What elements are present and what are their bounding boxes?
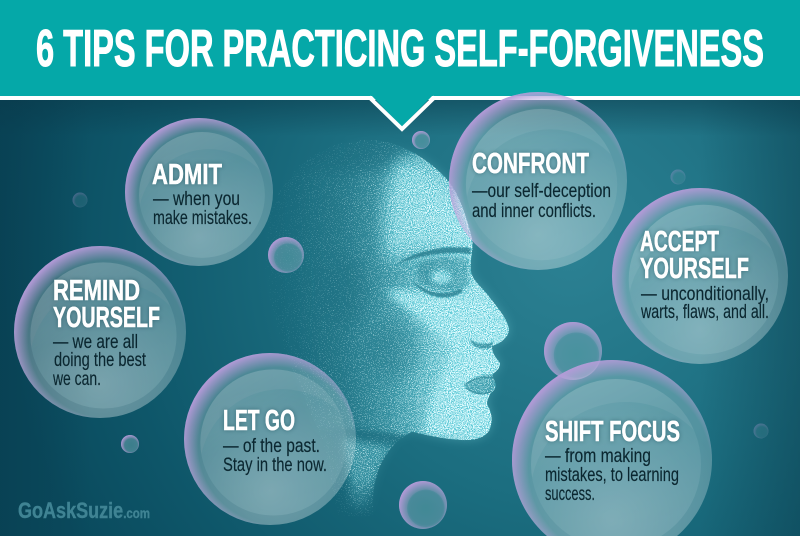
bubble: let go: Stay in the now. xyxy=(223,454,327,476)
bubble: confront: —our self-deception xyxy=(472,180,611,202)
bubble: accept yourself: — unconditionally, xyxy=(641,283,769,305)
bubble: confront: CONFRONT xyxy=(472,148,589,180)
bubble: let go: — of the past. xyxy=(223,435,320,457)
bubble: let go xyxy=(184,353,365,536)
bubble: remind yourself: we can. xyxy=(52,368,101,390)
watermark: GoAskSuzie.com xyxy=(18,498,150,523)
bubble: remind yourself: YOURSELF xyxy=(53,302,160,334)
bubble: let go: LET GO xyxy=(223,405,295,437)
bubble: shift focus: SHIFT FOCUS xyxy=(545,416,680,448)
bubble: shift focus: mistakes, to learning xyxy=(545,464,679,486)
bubble: accept yourself: ACCEPT xyxy=(640,226,719,258)
bubble: accept yourself xyxy=(612,188,797,394)
face illustration xyxy=(266,140,511,516)
bubble: confront xyxy=(449,92,636,300)
bubble: remind yourself xyxy=(14,246,195,447)
bubble: accept yourself: YOURSELF xyxy=(640,253,749,285)
bubble: admit xyxy=(125,118,280,291)
bubble: shift focus: — from making xyxy=(545,445,651,467)
bubble: admit: — when you xyxy=(153,188,240,210)
bubble: admit: ADMIT xyxy=(152,159,222,191)
title banner xyxy=(0,0,800,129)
bubble: admit: make mistakes. xyxy=(153,207,252,229)
bubble: remind yourself: REMIND xyxy=(53,275,140,307)
bubble: shift focus xyxy=(512,360,722,536)
bubble: remind yourself: — we are all xyxy=(53,331,138,353)
small bubbles xyxy=(72,131,768,529)
bubble: shift focus: success. xyxy=(545,483,595,505)
bubble: confront: and inner conflicts. xyxy=(472,200,596,222)
bubble: remind yourself: doing the best xyxy=(54,349,146,371)
